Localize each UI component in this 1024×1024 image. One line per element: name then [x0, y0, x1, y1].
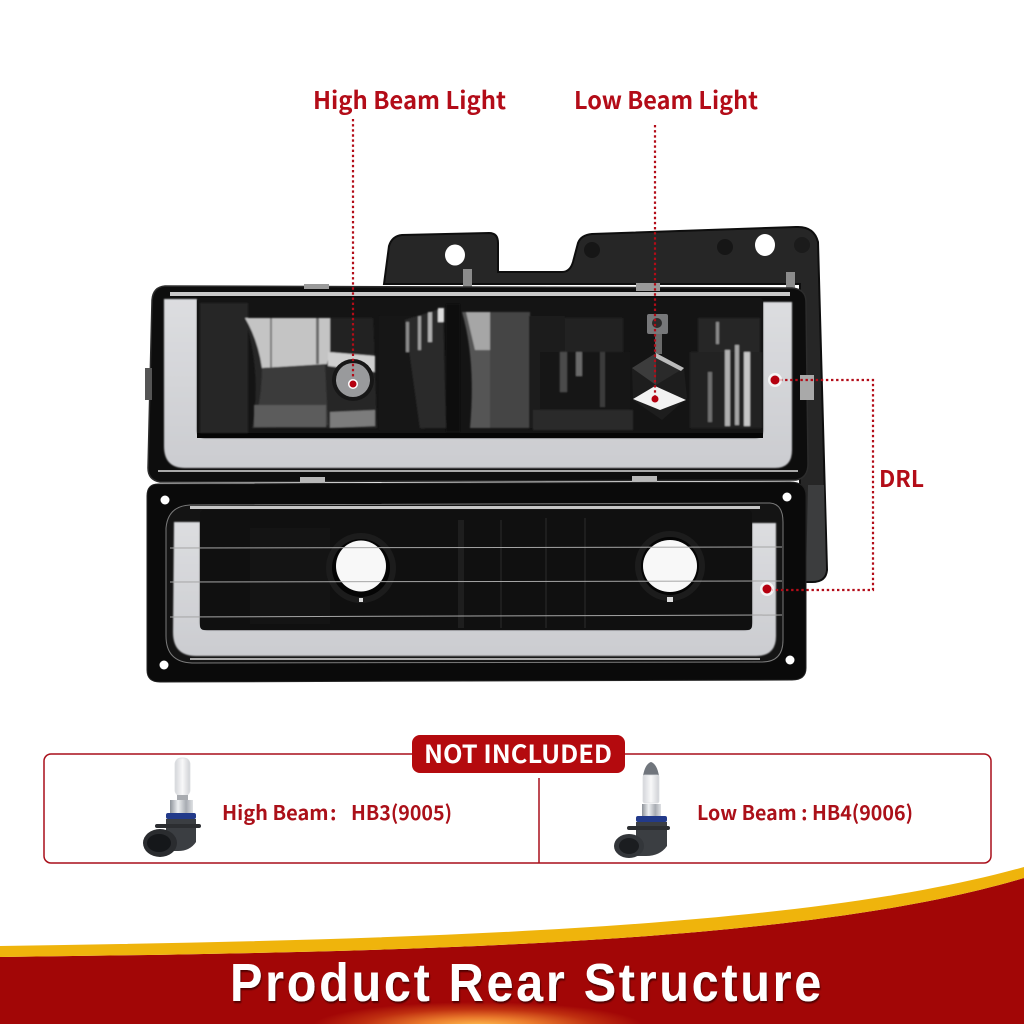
high beam text: High Beam: [222, 797, 329, 826]
right amber opening: [635, 531, 705, 602]
upper lamp DRL light bar: [164, 299, 792, 468]
badge: not included: NOT INCLUDED: [424, 735, 612, 771]
banner yellow stripe: [0, 867, 1024, 957]
panel outline: [44, 754, 991, 863]
panel divider: [538, 778, 540, 863]
callout: high beam light: High Beam Light: [313, 81, 506, 116]
left amber opening: [326, 533, 396, 603]
lower lamp plate: [147, 482, 806, 682]
high beam reflector: [200, 303, 460, 433]
lower lamp DRL light bar: [173, 522, 776, 656]
callout: low beam light: [574, 81, 758, 402]
callout: DRL: DRL: [879, 460, 924, 494]
headlight assembly: [145, 227, 827, 682]
lower lamp interior: [200, 510, 752, 630]
footer banner: [0, 867, 1024, 1024]
high beam bulb socket: [332, 359, 374, 401]
callout: low beam light: Low Beam Light: [574, 81, 758, 116]
lower lamp body: [147, 482, 806, 682]
callout: high beam light: [313, 81, 506, 389]
lower lamp screw holes: [160, 492, 794, 670]
footer title: Product Rear Structure: [230, 952, 824, 1013]
upper lamp interior: [197, 298, 763, 438]
banner orange glow: [310, 1000, 650, 1024]
icon: high beam bulb: [143, 758, 201, 857]
callout: DRL: [760, 373, 924, 596]
high beam text: HB3(9005): [351, 797, 452, 826]
upper lamp body: [145, 283, 814, 486]
low beam text: Low Beam : HB4(9006): [697, 797, 913, 826]
back housing plate: [384, 227, 827, 582]
low beam reflector: [462, 312, 762, 430]
high beam text: :: [330, 797, 336, 826]
icon: low beam bulb: [614, 762, 670, 858]
banner red wave: [0, 878, 1024, 1024]
low beam bulb shield: [632, 314, 687, 420]
panel: bulbs not included: [44, 735, 991, 863]
upper lamp frame: [148, 286, 808, 482]
mounting holes in housing: [445, 234, 826, 581]
lens lines: [170, 547, 782, 617]
metal clips on upper lamp: [145, 283, 814, 486]
